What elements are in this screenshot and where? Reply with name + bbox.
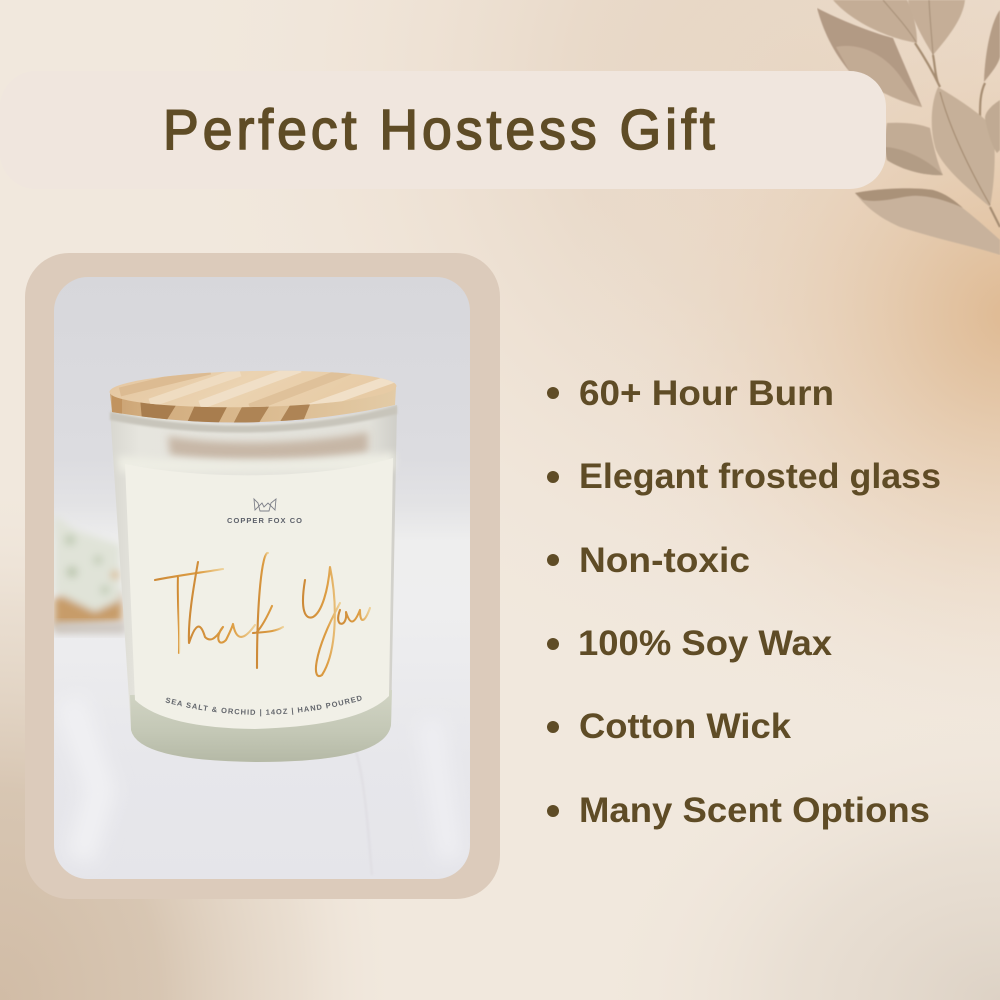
- item: 100% Soy Wax: 100% Soy Wax: [578, 624, 833, 663]
- wick and wax shadow: [168, 432, 368, 460]
- item: Cotton Wick: Cotton Wick: [579, 707, 792, 746]
- candle jar: [109, 370, 398, 762]
- marble table veining: [77, 759, 106, 852]
- background foliage: [54, 515, 122, 628]
- brand name: COPPER FOX CO: [227, 516, 302, 525]
- heading banner: [0, 71, 886, 189]
- paper label: [126, 458, 393, 729]
- item: 60+ Hour Burn: 60+ Hour Burn: [579, 374, 834, 413]
- panel: product photo frame: [25, 253, 500, 899]
- title: Perfect Hostess Gift: [163, 97, 715, 161]
- item: Many Scent Options: Many Scent Options: [579, 791, 930, 830]
- frosted glass jar: [110, 405, 397, 725]
- glass base: [130, 690, 392, 762]
- band below lid: [110, 406, 397, 433]
- scent line: SEA SALT & ORCHID | 14OZ | HAND POURED: [166, 696, 362, 716]
- script lettering: [155, 553, 370, 676]
- wooden lid: [110, 370, 396, 422]
- brand logo: [254, 499, 276, 511]
- product photo: [54, 277, 470, 879]
- item: Non-toxic: Non-toxic: [579, 541, 750, 580]
- decorative watercolor leaves: [817, 0, 1000, 255]
- item: Elegant frosted glass: Elegant frosted glass: [579, 457, 941, 496]
- feature list: [547, 374, 941, 830]
